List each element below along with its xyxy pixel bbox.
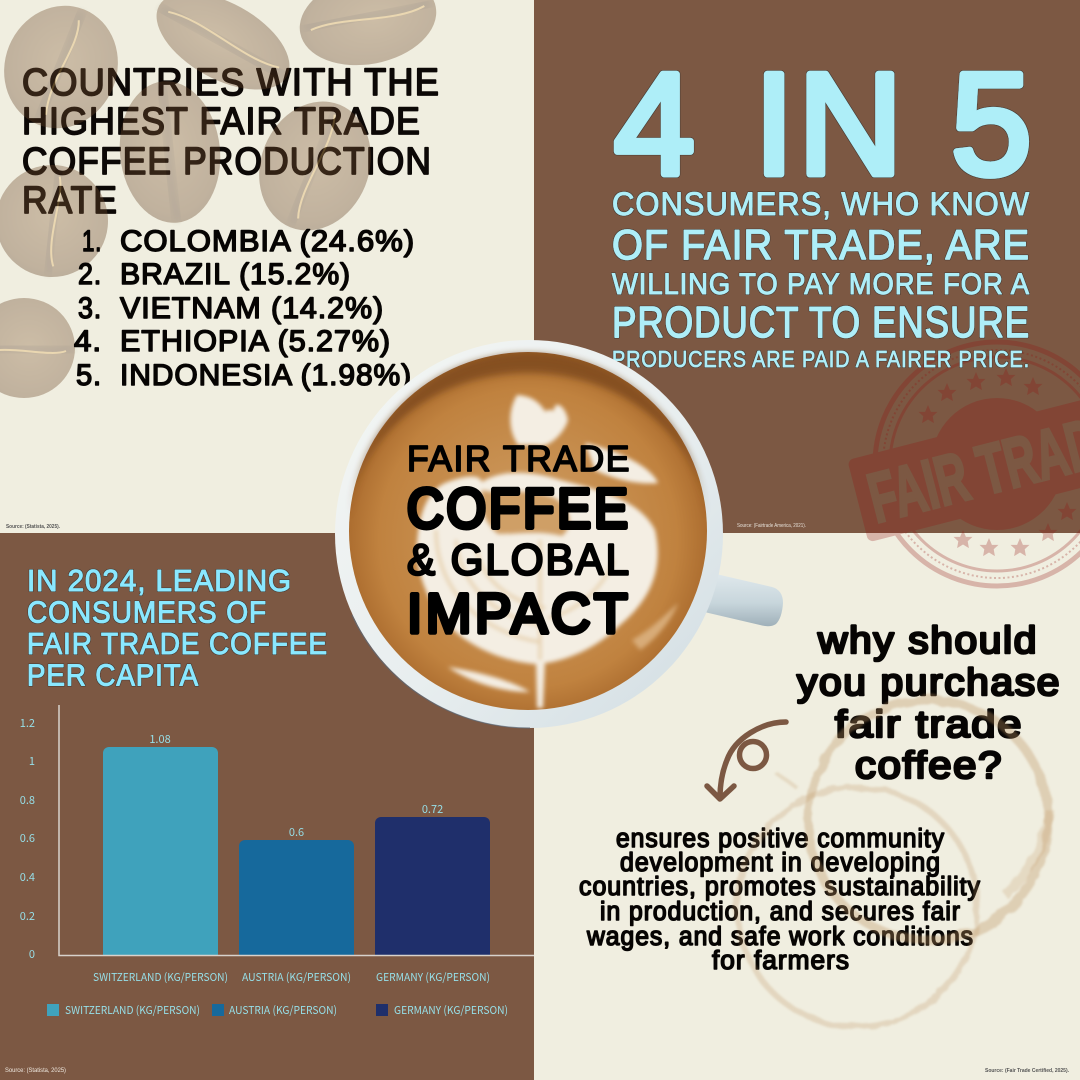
source note: Source: (Statista, 2025). [6, 524, 60, 530]
panel: top right brown background [534, 0, 1080, 533]
bar: Germany [375, 817, 490, 955]
heading: countries with highest production [22, 62, 440, 222]
coffee beans background [0, 0, 444, 398]
y axis labels: 0.8 [20, 792, 35, 808]
coffee ring stains [737, 700, 1050, 1027]
body text: reasons to buy: development in developing [620, 849, 941, 877]
value labels: 0.6 [289, 824, 304, 840]
legend [47, 1002, 508, 1018]
ranked country list: 3. [78, 292, 102, 325]
ranked country list: 4. [74, 325, 102, 358]
source note: Source: (Fair Trade Certified, 2025). [985, 1068, 1069, 1074]
heading: leading consumers: FAIR TRADE COFFEE [27, 626, 328, 661]
ranked country list: ETHIOPIA (5.27%) [120, 325, 391, 358]
bar: Austria [239, 840, 354, 955]
category labels [93, 969, 490, 985]
heading: why should you purchase: coffee? [855, 745, 1003, 787]
body text: reasons to buy: ensures positive community [616, 825, 945, 853]
arrow: curly pointing to text [707, 722, 786, 799]
icon: fair trade stamp [847, 342, 1080, 586]
legend: SWITZERLAND (KG/PERSON) [65, 1002, 200, 1018]
heading: leading consumers: CONSUMERS OF [27, 594, 267, 630]
heading: leading consumers [27, 563, 328, 692]
y axis labels: 1.2 [20, 715, 35, 731]
statement lines: CONSUMERS, WHO KNOW [612, 186, 1030, 222]
statistic: 4 in 5 consumers [612, 43, 1032, 372]
panel: bottom left brown background [0, 533, 534, 1080]
coffee surface with latte art [349, 352, 707, 710]
source note: Source: (Fairtrade America, 2021). [737, 523, 806, 529]
cup title: IMPACT [407, 582, 631, 644]
heading: why should you purchase: fair trade [835, 704, 1023, 746]
y axis labels: 1 [29, 753, 35, 769]
cup title [407, 438, 631, 644]
heading: countries with highest production: COFFEE PRODUCTION [22, 141, 432, 183]
y axis labels: 0.4 [20, 869, 35, 885]
statement lines: WILLING TO PAY MORE FOR A [612, 268, 1030, 301]
body text: reasons to buy: countries, promotes sustainability [579, 873, 981, 901]
heading: countries with highest production: COUNTRIES WITH THE [22, 62, 440, 104]
ranked country list: 1. [82, 225, 102, 258]
y axis labels: 0 [29, 946, 35, 962]
category labels: AUSTRIA (KG/PERSON) [242, 969, 351, 985]
statement lines [612, 186, 1030, 372]
latte art foam [417, 395, 678, 708]
legend: GERMANY (KG/PERSON) [394, 1002, 508, 1018]
bar chart: consumption per capita [20, 705, 534, 1018]
category labels: SWITZERLAND (KG/PERSON) [93, 969, 228, 985]
ranked country list: COLOMBIA (24.6%) [120, 225, 415, 258]
heading: why should you purchase: why should [817, 620, 1038, 662]
ranked country list: BRAZIL (15.2%) [120, 258, 351, 291]
coffee cup [335, 340, 783, 728]
category labels: GERMANY (KG/PERSON) [376, 969, 490, 985]
icon: cup handle [700, 574, 783, 626]
body text: reasons to buy: in production, and secures fair [600, 898, 961, 926]
legend: AUSTRIA (KG/PERSON) [229, 1002, 337, 1018]
cup title: & GLOBAL [407, 536, 631, 584]
ranked country list [74, 225, 415, 392]
panel: bottom right cream background [534, 533, 1080, 1080]
cup rim [335, 340, 723, 728]
y axis labels: 0.6 [20, 830, 35, 846]
source note: Source: (Statista, 2025) [5, 1068, 66, 1074]
body text: reasons to buy [579, 825, 981, 975]
ranked country list: 2. [78, 258, 102, 291]
heading: leading consumers: IN 2024, LEADING [27, 563, 292, 598]
caramel swirls in foam [436, 490, 614, 660]
heading: countries with highest production: HIGHEST FAIR TRADE [22, 101, 421, 143]
value labels [149, 731, 443, 840]
ranked country list: 5. [76, 359, 102, 392]
bar: Switzerland [103, 747, 218, 955]
body text: reasons to buy: wages, and safe work conditions [586, 923, 974, 951]
y axis labels [20, 715, 35, 962]
y axis labels: 0.2 [20, 908, 35, 924]
heading: countries with highest production: RATE [22, 180, 118, 222]
ranked country list: VIETNAM (14.2%) [120, 292, 384, 325]
value labels: 1.08 [149, 731, 171, 747]
statement lines: OF FAIR TRADE, ARE [612, 221, 1030, 268]
big number 4 in 5: 4 IN 5 [614, 43, 1032, 205]
heading: leading consumers: PER CAPITA [27, 658, 199, 692]
panel: top left production countries [0, 0, 534, 534]
cup title: COFFEE [407, 476, 631, 540]
body text: reasons to buy: for farmers [712, 947, 850, 975]
ranked country list: INDONESIA (1.98%) [120, 359, 412, 392]
heading: why should you purchase [797, 620, 1061, 787]
cup title: FAIR TRADE [407, 438, 631, 479]
heading: why should you purchase: you purchase [797, 662, 1061, 704]
value labels: 0.72 [422, 801, 443, 817]
